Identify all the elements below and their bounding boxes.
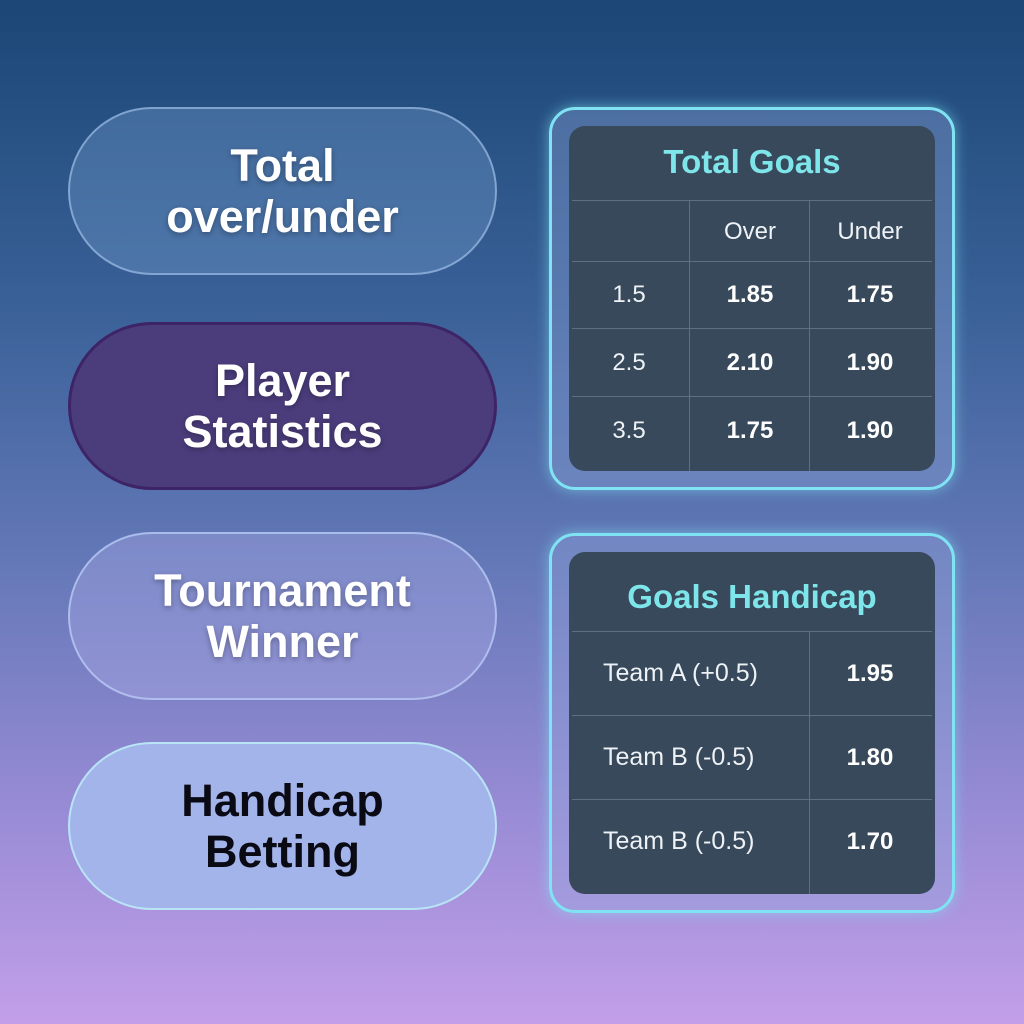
pill: player statistics: Player [215, 355, 350, 406]
panel: goals handicap table: 1.80 [847, 744, 893, 771]
panel: total goals table: 1.90 [847, 349, 893, 376]
panel: total goals table: 2.5 [612, 349, 646, 376]
pill: handicap betting: Handicap [181, 775, 384, 826]
panel: total goals table: 2.10 [727, 349, 773, 376]
pill: total over/under: Total [230, 140, 335, 191]
heading: total goals: Total Goals [663, 143, 841, 180]
panel: goals handicap table: 1.95 [847, 660, 893, 687]
pill: player statistics [68, 322, 497, 490]
panel: goals handicap table [549, 533, 955, 913]
pill: total over/under [68, 107, 497, 275]
panel: total goals table: 3.5 [612, 417, 646, 444]
panel: goals handicap table: Team A (+0.5) [603, 659, 758, 687]
panel: total goals table: Over [724, 218, 776, 245]
table cells [612, 218, 903, 444]
pill: tournament winner: Tournament [154, 565, 411, 616]
panel: total goals table: 1.5 [612, 281, 646, 308]
table cells [603, 659, 893, 855]
pill: handicap betting: Betting [205, 826, 360, 877]
panel: total goals table: 1.85 [727, 281, 773, 308]
pill: handicap betting [68, 742, 497, 910]
pill: tournament winner [68, 532, 497, 700]
pill: total over/under: over/under [166, 191, 399, 242]
panel: goals handicap table: Team B (-0.5) [603, 827, 754, 855]
panel: total goals table [549, 107, 955, 490]
panel: goals handicap table: 1.70 [847, 828, 893, 855]
panel: total goals table: 1.75 [727, 417, 773, 444]
panel: total goals table: 1.90 [847, 417, 893, 444]
pill: player statistics: Statistics [182, 406, 383, 457]
heading: goals handicap: Goals Handicap [627, 578, 877, 615]
panel: goals handicap table: Team B (-0.5) [603, 743, 754, 771]
pill: tournament winner: Winner [206, 616, 359, 667]
panel: total goals table: 1.75 [847, 281, 893, 308]
panel: total goals table: Under [837, 218, 903, 245]
